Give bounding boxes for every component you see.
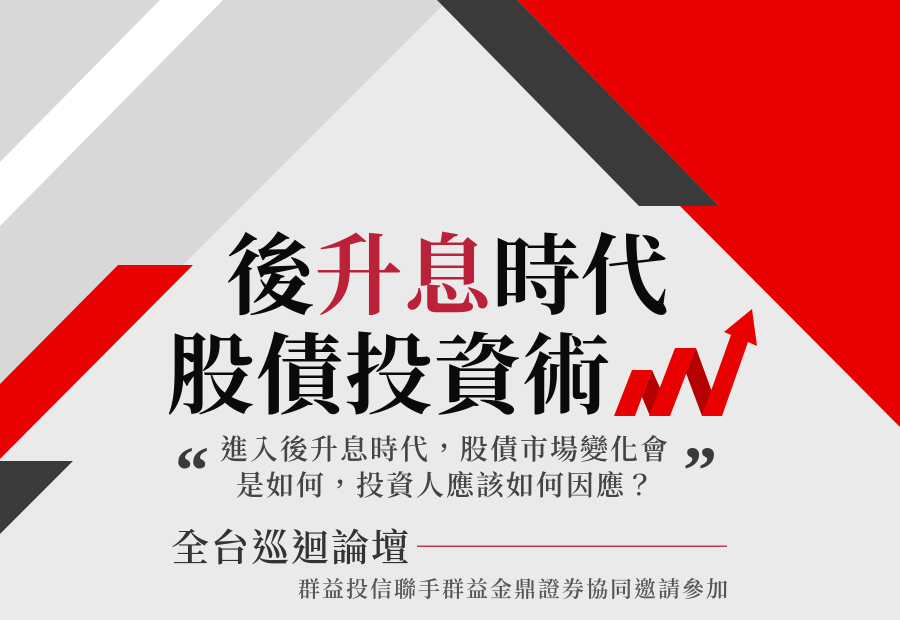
title line 1: 後升息時代	[226, 230, 670, 327]
icon: rising red arrow	[614, 309, 757, 416]
closing quote mark: ”	[683, 432, 717, 508]
intro text	[220, 434, 670, 502]
subheading: 全台巡迴論壇	[171, 528, 411, 570]
red corner shape top right	[517, 0, 900, 427]
divider line	[417, 546, 727, 547]
white diagonal stripe	[0, 0, 223, 226]
invitation text: 群益投信聯手群益金鼎證券協同邀請參加	[298, 577, 730, 602]
dark triangle left	[0, 461, 73, 534]
dark diagonal stripe top	[437, 0, 719, 206]
opening quote mark: “	[175, 432, 209, 508]
intro text: 是如何，投資人應該如何因應？	[236, 469, 656, 502]
red diagonal stripe left	[0, 265, 193, 459]
intro text: 進入後升息時代，股債市場變化會	[220, 434, 670, 466]
title line 2: 股債投資術	[167, 330, 611, 426]
panel: light grey corner triangle	[0, 0, 448, 448]
